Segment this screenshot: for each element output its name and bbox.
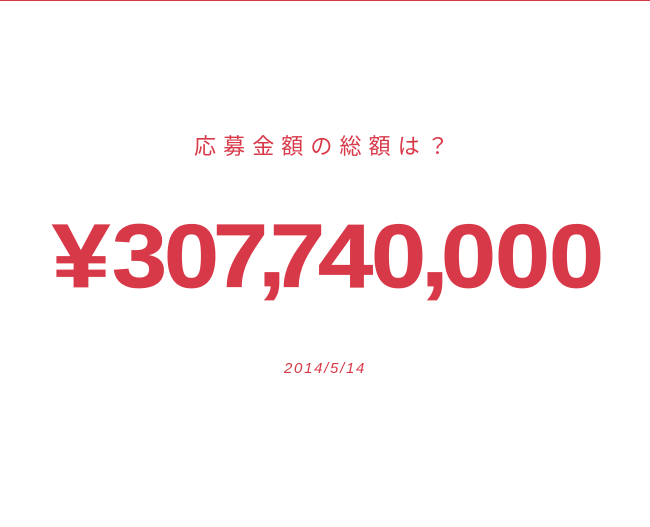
- total amount: ,: [258, 206, 286, 306]
- total amount: ¥: [52, 207, 110, 307]
- total amount: 0: [164, 207, 219, 307]
- top accent line: [0, 0, 650, 1]
- total amount: 3: [112, 207, 167, 307]
- total amount: 0: [495, 207, 550, 307]
- total amount: ,: [421, 206, 449, 306]
- total amount: 4: [318, 207, 373, 307]
- total amount: 0: [441, 207, 496, 307]
- total amount: 0: [371, 207, 426, 307]
- total amount: 7: [213, 207, 268, 307]
- total amount: 0: [549, 207, 604, 307]
- heading: 応募金額の総額は？: [194, 134, 456, 159]
- date: 2014/5/14: [284, 360, 366, 377]
- total amount: 7: [270, 207, 325, 307]
- total amount: [52, 206, 604, 307]
